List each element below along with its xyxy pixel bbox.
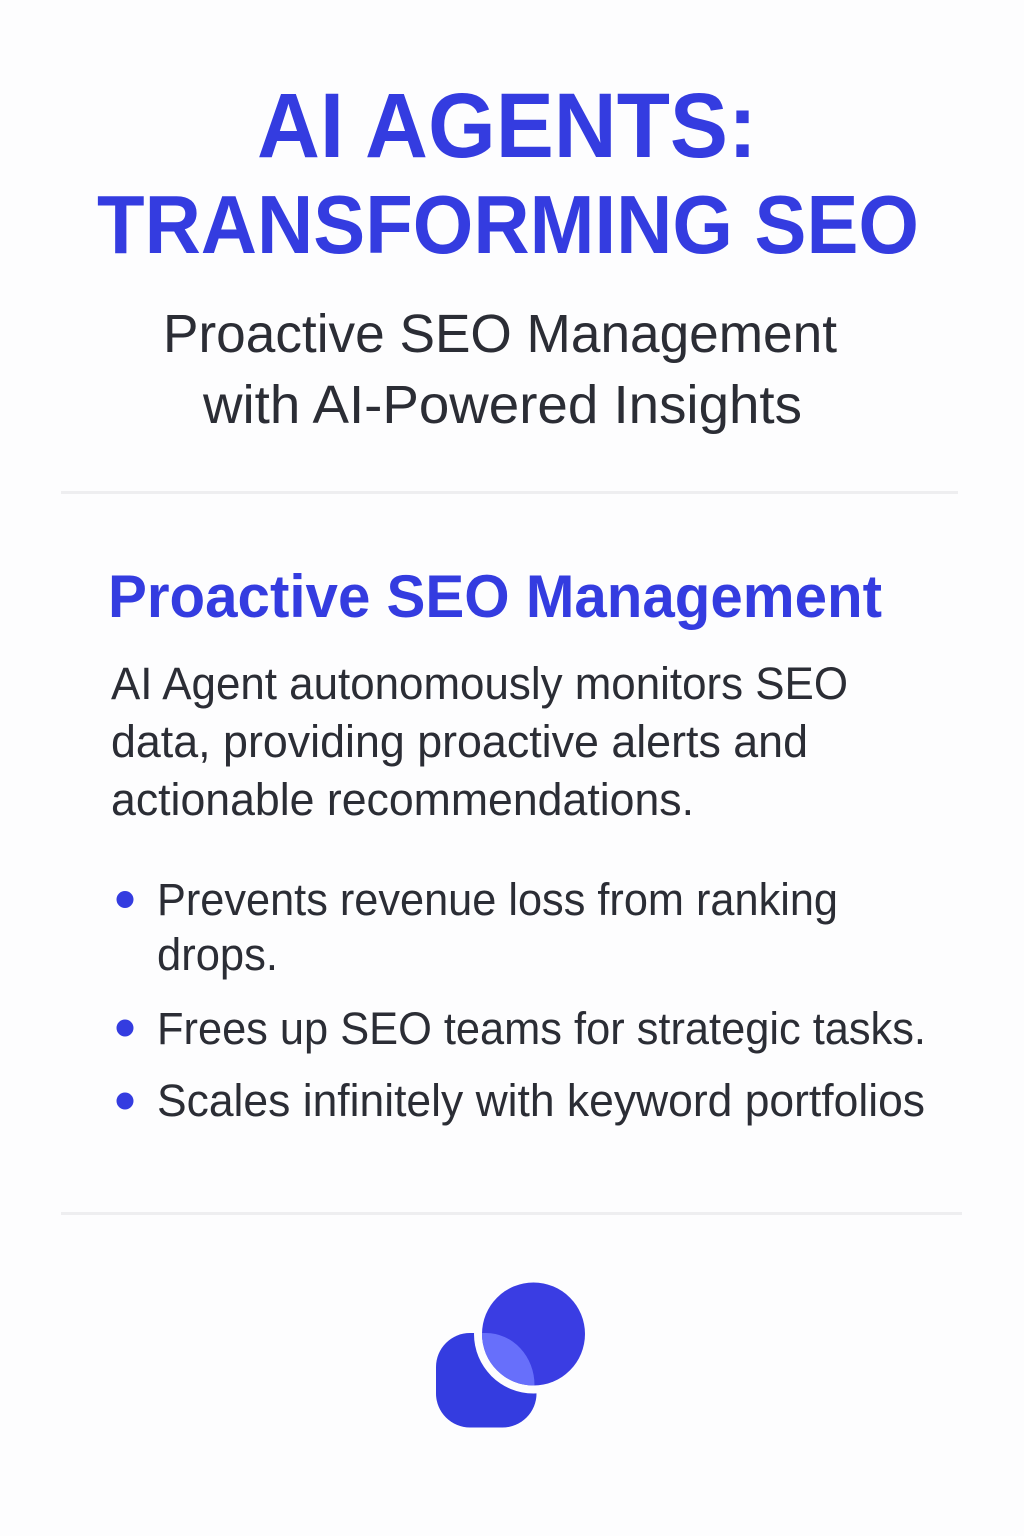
bullet: prevents revenue loss: Prevents revenue loss from ranking	[157, 874, 838, 925]
description text block: AI Agent autonomously monitors SEO	[111, 658, 848, 709]
bullet: prevents revenue loss	[116, 874, 838, 980]
subtitle	[163, 304, 837, 435]
icon: overlapping logo mark	[436, 1282, 585, 1428]
description text block: actionable recommendations.	[111, 774, 694, 825]
description text block: data, providing proactive alerts and	[111, 716, 808, 767]
subtitle: with AI-Powered Insights	[202, 375, 802, 435]
title	[97, 75, 919, 271]
subtitle: Proactive SEO Management	[163, 304, 837, 364]
bullet: frees up SEO teams: Frees up SEO teams for strategic tasks.	[157, 1003, 926, 1054]
bullet: scales infinitely: Scales infinitely with keyword portfolios	[157, 1075, 925, 1126]
bullet list	[116, 874, 926, 1126]
title: AI AGENTS:	[257, 75, 757, 177]
section heading: Proactive SEO Management	[108, 563, 882, 630]
title: TRANSFORMING SEO	[97, 178, 919, 271]
description text block	[111, 658, 848, 825]
bullet: prevents revenue loss: drops.	[157, 929, 278, 980]
infographic canvas	[61, 93, 962, 1428]
